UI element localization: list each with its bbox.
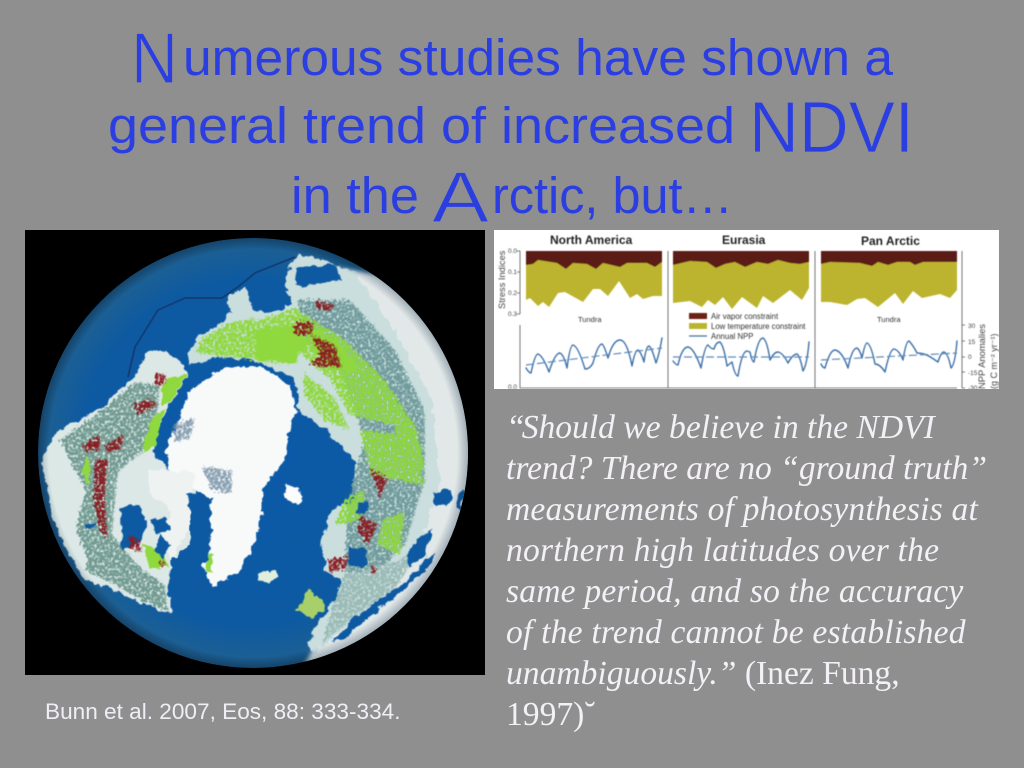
title	[108, 19, 914, 228]
axes	[517, 251, 965, 388]
left axis: stress indices: 0.0	[508, 248, 517, 255]
title: rctic, but…	[492, 167, 733, 224]
quotation	[506, 409, 987, 733]
region headings: Pan Arctic	[861, 234, 920, 248]
Arctic ice cap and Greenland	[148, 366, 303, 587]
North America land mass	[42, 350, 210, 615]
title: NDVI	[749, 88, 914, 168]
right axis: NPP anomalies: 30	[968, 323, 976, 330]
right axis: NPP anomalies: 15	[968, 339, 976, 346]
solid green core of Eurasia	[255, 318, 360, 370]
satellite globe image of the Arctic	[25, 230, 485, 675]
North American green patches	[84, 374, 187, 570]
Hudson Bay and inland waters	[84, 492, 214, 570]
title: general trend of increased	[108, 97, 735, 154]
region headings	[550, 233, 920, 248]
quotation: northern high latitudes over the	[506, 532, 939, 569]
ocean	[38, 238, 468, 668]
British Isles and Iceland	[258, 570, 325, 618]
Eurasia green vegetation	[195, 308, 425, 555]
quotation: “Should we believe in the NDVI	[506, 409, 935, 446]
sea-ice specks	[172, 418, 232, 493]
region headings: North America	[550, 233, 633, 247]
legend: Annual NPP	[711, 332, 753, 341]
Tundra labels: Tundra	[578, 315, 602, 324]
left axis: stress indices: 0.1	[508, 269, 517, 276]
Scandinavia, Baltic, Caspian and Mediterranean waters	[332, 490, 465, 642]
left axis: stress indices: 0.3	[508, 311, 517, 318]
Tundra labels	[578, 315, 901, 324]
right axis: NPP anomalies: NPP Anomalies	[976, 324, 987, 389]
legend: Low temperature constraint	[711, 322, 806, 331]
north-east Asian sea	[295, 264, 342, 287]
stress-pixel red patches	[83, 300, 388, 575]
left axis: stress indices: Stress Indices	[497, 250, 507, 309]
legend	[689, 312, 806, 341]
right axis: NPP anomalies: 0	[968, 354, 972, 361]
quotation: of the trend cannot be established	[506, 614, 966, 651]
region headings: Eurasia	[722, 233, 766, 247]
North American grey forest	[60, 382, 170, 612]
quotation: trend? There are no “ground truth”	[506, 450, 987, 487]
source caption: Bunn et al. 2007, Eos, 88: 333-334.	[45, 699, 400, 724]
Tundra labels: Tundra	[877, 315, 901, 324]
north Pacific shelf line	[128, 257, 295, 377]
right axis: NPP anomalies	[968, 323, 999, 392]
left axis: stress indices: 0.2	[508, 290, 517, 297]
left axis: stress indices	[497, 248, 517, 391]
title: umerous studies have shown a	[183, 29, 894, 86]
right axis: NPP anomalies: (g C m⁻² yr⁻¹)	[989, 334, 999, 389]
snow band of eastern Siberia and North Africa	[302, 266, 468, 662]
Eurasia land mass	[188, 253, 440, 655]
globe rim shading	[38, 238, 468, 668]
quotation: 1997)˘	[506, 696, 596, 733]
Eurasia grey forest	[298, 300, 425, 645]
panel: North America stress areas	[526, 251, 662, 307]
stress and NPP chart panel	[494, 230, 999, 389]
quotation: same period, and so the accuracy	[506, 573, 963, 610]
legend: Air vapor constraint	[711, 312, 779, 321]
quotation: measurements of photosynthesis at	[506, 491, 978, 528]
panel: Eurasia stress areas	[673, 251, 809, 309]
panel: Pan Arctic stress areas	[821, 251, 957, 307]
trend lines: NPP anomalies	[526, 338, 957, 376]
quotation: unambiguously.” (Inez Fung,	[506, 655, 900, 692]
dashed trend lines	[526, 348, 957, 365]
title: N	[131, 19, 178, 99]
right axis: NPP anomalies: -15	[968, 370, 978, 377]
title: in the	[291, 167, 419, 224]
